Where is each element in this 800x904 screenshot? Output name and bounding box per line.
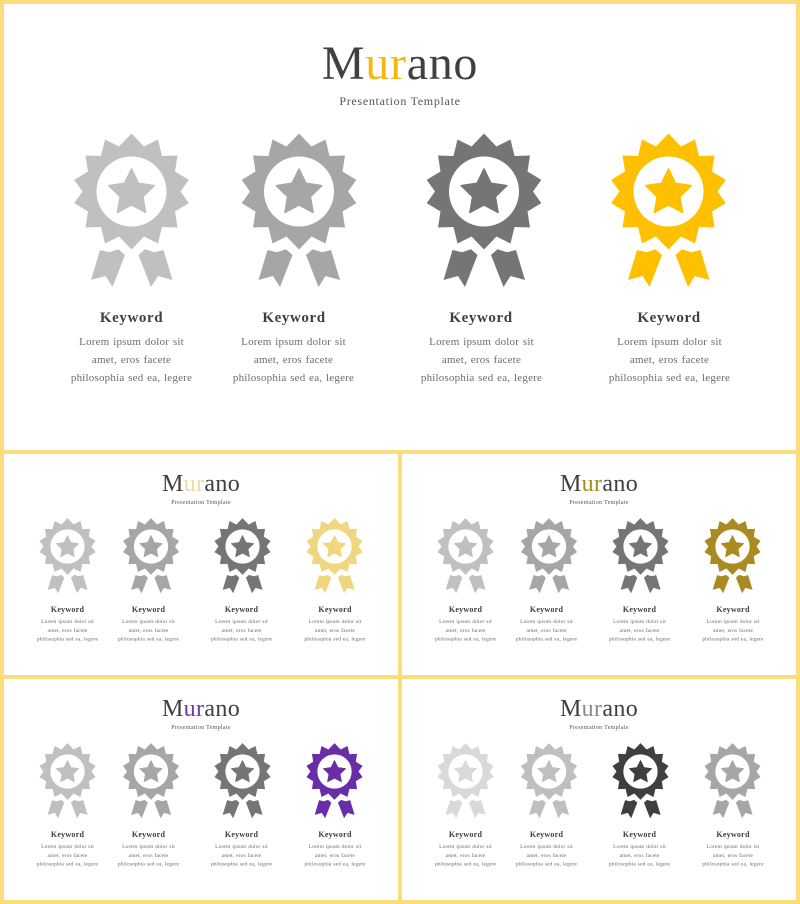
body text 2: Lorem ipsum dolor sit	[122, 619, 175, 625]
panel: purple variant	[37, 696, 366, 868]
icon: award badge 2	[123, 743, 179, 818]
body text 4: philosophia sed ea, legere	[609, 372, 730, 384]
subtitle: Presentation Template	[569, 725, 629, 731]
subtitle: Presentation Template	[171, 725, 231, 731]
panel: dark gold variant	[435, 471, 764, 642]
title: Murano	[560, 471, 638, 497]
body text 4: Lorem ipsum dolor sit	[309, 844, 361, 850]
body text 1: philosophia sed ea, legere	[37, 636, 99, 642]
body text 3: amet, eros facete	[620, 627, 660, 634]
body text 4: philosophia sed ea, legere	[702, 636, 764, 642]
body text 2: Lorem ipsum dolor sit	[520, 844, 573, 850]
keyword 2: Keyword	[132, 605, 165, 614]
keyword 3: Keyword	[225, 830, 258, 839]
keyword 2: Keyword	[530, 830, 563, 839]
icon: award badge 3	[214, 743, 271, 818]
body text 3: amet, eros facete	[442, 354, 521, 366]
keyword 4: Keyword	[716, 605, 750, 614]
body text 3: philosophia sed ea, legere	[211, 862, 273, 868]
body text 4: amet, eros facete	[315, 627, 355, 634]
body text 2: amet, eros facete	[527, 627, 567, 634]
keyword 4: Keyword	[318, 830, 352, 839]
title: Murano	[162, 696, 240, 722]
keyword 2: Keyword	[262, 310, 326, 326]
body text 4: amet, eros facete	[315, 852, 355, 859]
body text 2: amet, eros facete	[129, 852, 169, 859]
body text 4: Lorem ipsum dolor sit	[707, 619, 759, 625]
body text 1: Lorem ipsum dolor sit	[41, 844, 94, 850]
icon: award badge 1	[437, 518, 494, 593]
icon: award badge 2	[242, 134, 356, 287]
keyword 3: Keyword	[225, 605, 258, 614]
title: Murano	[162, 471, 240, 497]
body text 2: amet, eros facete	[527, 852, 567, 859]
icon: award badge 1	[74, 134, 189, 287]
panel: main slide, yellow accent	[71, 37, 730, 384]
icon: award badge 1	[437, 743, 494, 818]
body text 1: amet, eros facete	[446, 852, 486, 859]
body text 3: philosophia sed ea, legere	[421, 372, 542, 384]
keyword 2: Keyword	[132, 830, 165, 839]
icon: award badge 4	[306, 743, 363, 818]
icon: award badge 3	[612, 743, 669, 818]
body text 3: amet, eros facete	[620, 852, 660, 859]
body text 2: Lorem ipsum dolor sit	[122, 844, 175, 850]
subtitle: Presentation Template	[569, 500, 629, 506]
icon: award badge 1	[39, 743, 96, 818]
title: Murano	[322, 37, 478, 90]
title: Murano	[560, 696, 638, 722]
body text 1: Lorem ipsum dolor sit	[41, 619, 94, 625]
keyword 4: Keyword	[318, 605, 352, 614]
body text 4: philosophia sed ea, legere	[304, 636, 366, 642]
body text 4: amet, eros facete	[630, 354, 709, 366]
body text 1: Lorem ipsum dolor sit	[439, 844, 492, 850]
icon: award badge 1	[39, 518, 96, 593]
icon: award badge 2	[521, 518, 577, 593]
body text 3: Lorem ipsum dolor sit	[429, 336, 534, 348]
keyword 3: Keyword	[623, 830, 656, 839]
keyword 1: Keyword	[449, 605, 482, 614]
body text 2: philosophia sed ea, legere	[118, 636, 180, 642]
body text 4: Lorem ipsum dolor sit	[309, 619, 361, 625]
subtitle: Presentation Template	[171, 500, 231, 506]
keyword 4: Keyword	[637, 310, 701, 326]
body text 3: philosophia sed ea, legere	[609, 636, 671, 642]
keyword 3: Keyword	[623, 605, 656, 614]
icon: award badge 4	[306, 518, 363, 593]
body text 1: amet, eros facete	[92, 354, 171, 366]
body text 3: amet, eros facete	[222, 852, 262, 859]
icon: award badge 4	[704, 743, 761, 818]
keyword 1: Keyword	[51, 605, 84, 614]
icon: award badge 2	[123, 518, 179, 593]
icon: award badge 3	[427, 134, 541, 287]
body text 1: amet, eros facete	[446, 627, 486, 634]
body text 1: philosophia sed ea, legere	[37, 862, 99, 868]
body text 4: Lorem ipsum dolor sit	[707, 844, 759, 850]
keyword 2: Keyword	[530, 605, 563, 614]
body text 2: philosophia sed ea, legere	[516, 636, 578, 642]
body text 1: amet, eros facete	[48, 852, 88, 859]
body text 3: Lorem ipsum dolor sit	[613, 619, 666, 625]
body text 2: Lorem ipsum dolor sit	[520, 619, 573, 625]
icon: award badge 3	[214, 518, 271, 593]
panel: pale yellow variant	[37, 471, 366, 642]
keyword 3: Keyword	[449, 310, 513, 326]
body text 2: Lorem ipsum dolor sit	[241, 336, 346, 348]
body text 2: amet, eros facete	[254, 354, 333, 366]
body text 1: philosophia sed ea, legere	[435, 636, 497, 642]
body text 3: philosophia sed ea, legere	[609, 862, 671, 868]
icon: award badge 4	[611, 134, 726, 287]
subtitle: Presentation Template	[339, 94, 461, 108]
body text 4: amet, eros facete	[713, 627, 753, 634]
body text 4: amet, eros facete	[713, 852, 753, 859]
panel: greyscale variant	[435, 696, 764, 868]
body text 1: philosophia sed ea, legere	[435, 862, 497, 868]
body text 3: philosophia sed ea, legere	[211, 636, 273, 642]
body text 2: philosophia sed ea, legere	[233, 372, 354, 384]
icon: award badge 3	[612, 518, 669, 593]
body text 3: Lorem ipsum dolor sit	[215, 619, 268, 625]
keyword 1: Keyword	[449, 830, 482, 839]
icon: award badge 2	[521, 743, 577, 818]
body text 2: amet, eros facete	[129, 627, 169, 634]
body text 1: amet, eros facete	[48, 627, 88, 634]
body text 2: philosophia sed ea, legere	[516, 862, 578, 868]
body text 3: Lorem ipsum dolor sit	[215, 844, 268, 850]
icon: award badge 4	[704, 518, 761, 593]
body text 4: philosophia sed ea, legere	[702, 862, 764, 868]
body text 1: philosophia sed ea, legere	[71, 372, 192, 384]
body text 1: Lorem ipsum dolor sit	[79, 336, 184, 348]
body text 3: amet, eros facete	[222, 627, 262, 634]
body text 4: Lorem ipsum dolor sit	[617, 336, 722, 348]
body text 3: Lorem ipsum dolor sit	[613, 844, 666, 850]
keyword 1: Keyword	[100, 310, 163, 326]
body text 1: Lorem ipsum dolor sit	[439, 619, 492, 625]
body text 4: philosophia sed ea, legere	[304, 862, 366, 868]
body text 2: philosophia sed ea, legere	[118, 862, 180, 868]
keyword 4: Keyword	[716, 830, 750, 839]
keyword 1: Keyword	[51, 830, 84, 839]
